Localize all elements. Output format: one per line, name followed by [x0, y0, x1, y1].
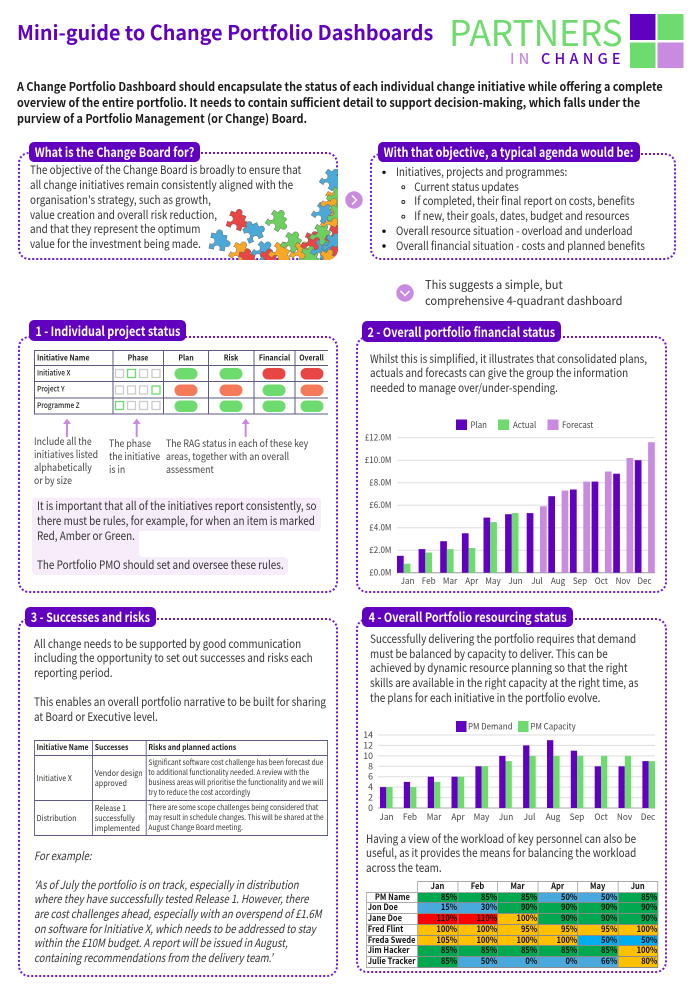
title: Mini-guide to Change Portfolio Dashboards [17, 17, 433, 46]
workload heat table: 66% [601, 955, 617, 967]
body text: organisation's strategy, such as growth, [30, 192, 211, 208]
workload heat table: Jane Doe [368, 912, 402, 924]
conclusion text: comprehensive 4-quadrant dashboard [425, 292, 623, 309]
successes and risks table: try to reduce the cost accordingly [148, 787, 250, 798]
bar chart: PM demand and capacity: Jan [379, 811, 394, 823]
status table: Phase [128, 352, 148, 364]
bar chart: plan actual forecast: Dec [637, 575, 652, 587]
bar chart: plan actual forecast: £8.0M [369, 476, 391, 489]
conclusion text: This suggests a simple, but [425, 276, 563, 293]
workload heat table: 110% [476, 912, 497, 924]
workload heat table: 90% [521, 901, 537, 913]
body text [30, 162, 302, 252]
body text [370, 631, 638, 706]
workload heat table: Jon Doe [368, 901, 398, 913]
body text: the plans for each initiative in the portfolio evolve. [370, 690, 600, 706]
heading: 4 - Overall Portfolio resourcing status [368, 606, 567, 626]
bar chart: PM demand and capacity: Jun [499, 811, 513, 823]
workload text [366, 830, 636, 876]
workload heat table: 0% [525, 955, 537, 967]
chart legend: Plan [470, 419, 487, 431]
panel: what is the Change Board for [18, 142, 338, 260]
successes and risks table: There are some scope challenges being considered that [148, 802, 318, 813]
body text: Successfully delivering the portfolio requires that demand [370, 631, 636, 647]
bar chart: PM demand and capacity: 2 [368, 791, 373, 804]
workload heat table: 90% [561, 901, 577, 913]
example quote: ‘As of July the portfolio is on track, especially in distribution [34, 877, 298, 893]
annotation: initiatives: or by size [34, 472, 72, 487]
highlighted background [32, 498, 321, 575]
bar chart: plan actual forecast: Jan [401, 575, 414, 587]
bar chart: PM demand and capacity: Oct [594, 811, 608, 823]
bar chart: PM demand and capacity: 4 [368, 780, 373, 793]
successes and risks table: business areas will prioritise the functionality and we will [148, 777, 323, 788]
chart legend: Forecast [562, 419, 593, 431]
status table: Project Y [37, 384, 65, 395]
bar chart: plan actual forecast: Mar [443, 575, 458, 587]
workload heat table: 100% [516, 912, 537, 924]
status table: Plan [178, 352, 194, 364]
rules text: The Portfolio PMO should set and oversee these rules. [37, 557, 284, 573]
logo: Partners in Change [449, 6, 684, 69]
heading: With that objective, a typical agenda would be: [384, 142, 634, 160]
bar chart: PM demand and capacity: 10 [363, 749, 373, 762]
intro text: A Change Portfolio Dashboard should encapsulate the status of each individual change initiative while offering a complete [17, 78, 663, 95]
body text: and that they represent the optimum [30, 221, 200, 237]
workload heat table: PM Name [375, 891, 410, 903]
workload heat table: Fred Flint [368, 923, 403, 935]
body text: achieved by dynamic resource planning so that the right [370, 660, 627, 676]
icon: right chevron arrow [345, 191, 363, 209]
status table: Initiative Name [37, 352, 90, 364]
workload heat table: 50% [601, 934, 617, 946]
workload heat table: 90% [561, 912, 577, 924]
body text: including the opportunity to set out successes and risks each [34, 650, 312, 666]
bar chart: plan actual forecast: Aug [551, 575, 565, 587]
example quote: are cost challenges ahead, especially with an overspend of £1.6M [34, 906, 321, 922]
workload text: Having a view of the workload of key personnel can also be [366, 830, 636, 846]
agenda list text: Current status updates [414, 179, 518, 195]
body text: value creation and overall risk reduction, [30, 206, 217, 222]
bar chart: plan actual forecast: May [485, 575, 501, 587]
up arrows [63, 418, 250, 437]
workload heat table: 100% [516, 934, 537, 946]
status table: Financial [259, 352, 291, 364]
status table: Risk [224, 352, 239, 364]
workload heat table: Freda Swede [368, 934, 416, 946]
workload heat table: 85% [521, 891, 537, 903]
chart legend: Actual [513, 419, 536, 431]
body text: value for the investment being made. [30, 236, 201, 252]
workload heat table: 0% [565, 955, 577, 967]
workload heat table: Jim Hacker [368, 944, 410, 956]
workload heat table: 85% [441, 955, 457, 967]
workload text: across the team. [366, 860, 442, 876]
body text: The objective of the Change Board is broadly to ensure that [30, 162, 301, 178]
status table [34, 350, 328, 414]
body text: at Board or Executive level. [34, 709, 157, 725]
heading: What is the Change Board for? [35, 142, 194, 161]
workload heat table: May [590, 880, 605, 892]
successes and risks table: Initiative X [37, 772, 72, 784]
bar chart: PM demand and capacity: 8 [368, 759, 373, 772]
agenda list text [396, 164, 645, 254]
panel 3: successes and risks [18, 606, 338, 977]
workload heat table: 100% [557, 934, 577, 946]
workload heat table: 50% [561, 891, 577, 903]
bar chart: plan actual forecast: £4.0M [369, 521, 391, 534]
agenda list text: Overall resource situation - overload and underload [396, 223, 632, 239]
panel border [18, 152, 338, 260]
panel border [356, 336, 667, 593]
workload heat table: 100% [637, 923, 657, 935]
panel 2: overall portfolio financial status [356, 321, 667, 593]
logo wordmark: PARTNERS [449, 6, 622, 57]
workload heat table: 100% [436, 923, 457, 935]
chart legend [456, 720, 576, 733]
intro text [17, 78, 663, 127]
successes and risks table: approved [95, 777, 127, 789]
bar chart: plan actual forecast: Jul [531, 575, 543, 587]
workload heat table: 90% [601, 912, 617, 924]
bar chart: PM demand and capacity: 12 [363, 738, 373, 751]
workload heat table: 90% [641, 901, 657, 913]
workload heat table: 100% [637, 944, 657, 956]
workload heat table [366, 880, 658, 968]
bar chart: plan actual forecast: £10.0M [365, 454, 391, 466]
successes and risks table: may result in schedule changes. This will be shared at the [148, 812, 324, 823]
chart legend: PM Demand [468, 720, 512, 733]
bar chart: plan actual forecast: Sep [573, 575, 587, 587]
bar chart: PM demand and capacity: Sep [570, 811, 584, 823]
bar chart: PM demand and capacity: Aug [546, 811, 561, 823]
rules text: there must be rules, for example, for when an item is marked [37, 513, 315, 529]
annotation: RAG status: The RAG status in each of these key [166, 434, 308, 450]
body text: must be balanced by capacity to deliver. This can be [370, 646, 607, 662]
status table: Overall [299, 352, 324, 364]
workload heat table: Mar [510, 880, 525, 892]
example quote: containing recommendations from the delivery team.’ [34, 950, 272, 966]
example label: For example: [34, 848, 91, 864]
annotation: RAG status [166, 434, 308, 476]
workload heat table: Julie Tracker [368, 955, 416, 967]
example quote [34, 877, 322, 966]
body text: Whilst this is simplified, it illustrates that consolidated plans, [370, 350, 647, 366]
body text: all change initiatives remain consistently aligned with the [30, 177, 293, 193]
panel border [18, 618, 338, 977]
successes and risks table [34, 740, 328, 836]
workload heat table: Feb [471, 880, 484, 892]
intro text: overview of the entire portfolio. It needs to contain sufficient detail to support decision-making, which falls under the [17, 94, 640, 111]
workload heat table: Jun [631, 880, 645, 892]
workload heat table: 85% [641, 891, 657, 903]
example quote: within the £10M budget. A report will be issued in August, [34, 935, 287, 951]
bar chart: PM demand and capacity: 6 [368, 770, 373, 783]
icon: down chevron arrow [396, 284, 414, 302]
logo squares [630, 14, 684, 68]
agenda list text: If new, their goals, dates, budget and resources [414, 208, 629, 224]
workload heat table: 85% [481, 891, 497, 903]
workload heat table: 85% [521, 944, 537, 956]
workload heat table: 85% [441, 944, 457, 956]
successes and risks table: Distribution [37, 812, 77, 824]
bar chart: plan actual forecast: £2.0M [369, 544, 391, 556]
bar chart: PM demand and capacity: Apr [451, 811, 465, 823]
workload heat table: 80% [641, 955, 657, 967]
body text: All change needs to be supported by good communication [34, 636, 301, 652]
panel 1: individual project status [18, 320, 338, 593]
bar chart: plan actual forecast: Jun [508, 575, 523, 587]
workload heat table: 50% [601, 891, 617, 903]
successes and risks table: successfully [95, 812, 135, 824]
annotation: RAG status: areas, together with an overall [166, 448, 289, 462]
agenda list text: Overall financial situation - costs and planned benefits [396, 238, 645, 254]
workload heat table: 95% [561, 923, 577, 935]
workload heat table: 15% [441, 901, 457, 913]
list bullets [382, 170, 406, 248]
bar chart: PM demand and capacity: 14 [363, 728, 373, 741]
bar chart: plan actual forecast: Apr [465, 575, 479, 587]
successes and risks table: Initiative Name [37, 742, 89, 753]
successes and risks table: Successes [95, 742, 128, 753]
panel border [356, 618, 667, 973]
annotation: RAG status: assessment [166, 460, 214, 476]
annotation: initiatives: alphabetically [34, 459, 91, 474]
rules text: It is important that all of the initiatives report consistently, so [37, 498, 316, 514]
bar chart: plan actual forecast [365, 419, 655, 587]
workload heat table: 95% [601, 923, 617, 935]
body text: needed to manage over/under-spending. [370, 380, 558, 396]
workload heat table: 85% [561, 944, 577, 956]
intro text: purview of a Portfolio Management (or Change) Board. [17, 110, 307, 127]
bar chart: PM demand and capacity: Dec [641, 811, 656, 823]
heading: 1 - Individual project status [35, 321, 180, 340]
successes and risks table: Release 1 [95, 802, 126, 814]
successes and risks table: Risks and planned actions [148, 742, 236, 753]
workload heat table: 85% [481, 944, 497, 956]
annotation: phase: is in [109, 460, 125, 476]
workload heat table: Jan [431, 880, 444, 892]
workload heat table: 50% [481, 955, 497, 967]
logo strapline: IN CHANGE [510, 48, 625, 69]
bar chart: PM demand and capacity: Nov [617, 811, 633, 823]
annotation: initiatives [34, 433, 98, 487]
icon: jigsaw puzzle pieces [208, 168, 338, 260]
workload heat table: 100% [476, 934, 497, 946]
bar chart: PM demand and capacity: Mar [427, 811, 442, 823]
bar chart: PM demand and capacity [363, 720, 656, 823]
workload heat table: 50% [641, 934, 657, 946]
workload heat table: 90% [641, 912, 657, 924]
workload heat table: 30% [481, 901, 497, 913]
agenda list text: Initiatives, projects and programmes: [396, 164, 567, 180]
example quote: where they have successfully tested Release 1. However, there [34, 891, 308, 907]
annotation: phase: the initiative [109, 448, 160, 462]
bar chart: plan actual forecast: £0.0M [369, 566, 391, 579]
bar chart: PM demand and capacity: May [474, 811, 490, 823]
successes and risks table: Significant software cost challenge has been forecast due [148, 757, 323, 768]
body text: actuals and forecasts can give the group the information [370, 365, 628, 381]
bar chart: plan actual forecast: Feb [422, 575, 436, 587]
bar chart: PM demand and capacity: Feb [403, 811, 417, 823]
example quote: on software for Initiative X, which needs to be addressed to stay [34, 921, 315, 937]
agenda list text: If completed, their final report on costs, benefits [414, 193, 634, 209]
successes and risks table: August Change Board meeting. [148, 822, 243, 833]
status table: Initiative X [37, 368, 71, 379]
successes and risks table: to additional functionality needed. A review with the [148, 767, 309, 778]
workload heat table: 95% [521, 923, 537, 935]
panel 4: overall portfolio resourcing status [356, 606, 667, 973]
conclusion text [425, 276, 623, 309]
body text: reporting period. [34, 665, 112, 681]
workload heat table: 85% [601, 944, 617, 956]
body text [34, 636, 326, 725]
rules text: Red, Amber or Green. [37, 528, 135, 544]
body text: This enables an overall portfolio narrative to be built for sharing [34, 694, 325, 710]
body text: skills are available in the right capacity at the right time, as [370, 675, 638, 691]
workload heat table: Apr [551, 880, 564, 892]
chart legend: PM Capacity [531, 720, 576, 733]
panel: typical agenda [370, 142, 676, 260]
annotation: phase [109, 434, 160, 476]
annotation: initiatives: initiatives listed [34, 446, 98, 461]
bar chart: plan actual forecast: £12.0M [365, 431, 391, 444]
workload heat table: 110% [436, 912, 457, 924]
successes and risks table: Vendor design [95, 767, 143, 779]
panel border [18, 336, 338, 593]
heading: 3 - Successes and risks [31, 606, 150, 626]
bar chart: plan actual forecast: £6.0M [369, 499, 391, 511]
bar chart: PM demand and capacity: 0 [368, 801, 373, 814]
body text [370, 350, 647, 396]
workload heat table: 85% [441, 891, 457, 903]
workload heat table: 105% [436, 934, 457, 946]
bar chart: PM demand and capacity: Jul [524, 811, 536, 823]
successes and risks table: implemented [95, 822, 140, 834]
rules text [37, 498, 316, 573]
workload text: useful, as it provides the means for balancing the workload [366, 845, 636, 861]
workload heat table: 90% [601, 901, 617, 913]
annotation: initiatives: Include all the [34, 433, 91, 448]
panel border [370, 153, 676, 260]
bar chart: plan actual forecast: Nov [616, 575, 631, 587]
annotation: phase: The phase [109, 434, 151, 450]
workload heat table: 100% [476, 923, 497, 935]
status table: Programme Z [37, 401, 80, 411]
bar chart: plan actual forecast: Oct [595, 575, 609, 587]
chart legend [456, 419, 593, 431]
heading: 2 - Overall portfolio financial status [368, 322, 555, 341]
